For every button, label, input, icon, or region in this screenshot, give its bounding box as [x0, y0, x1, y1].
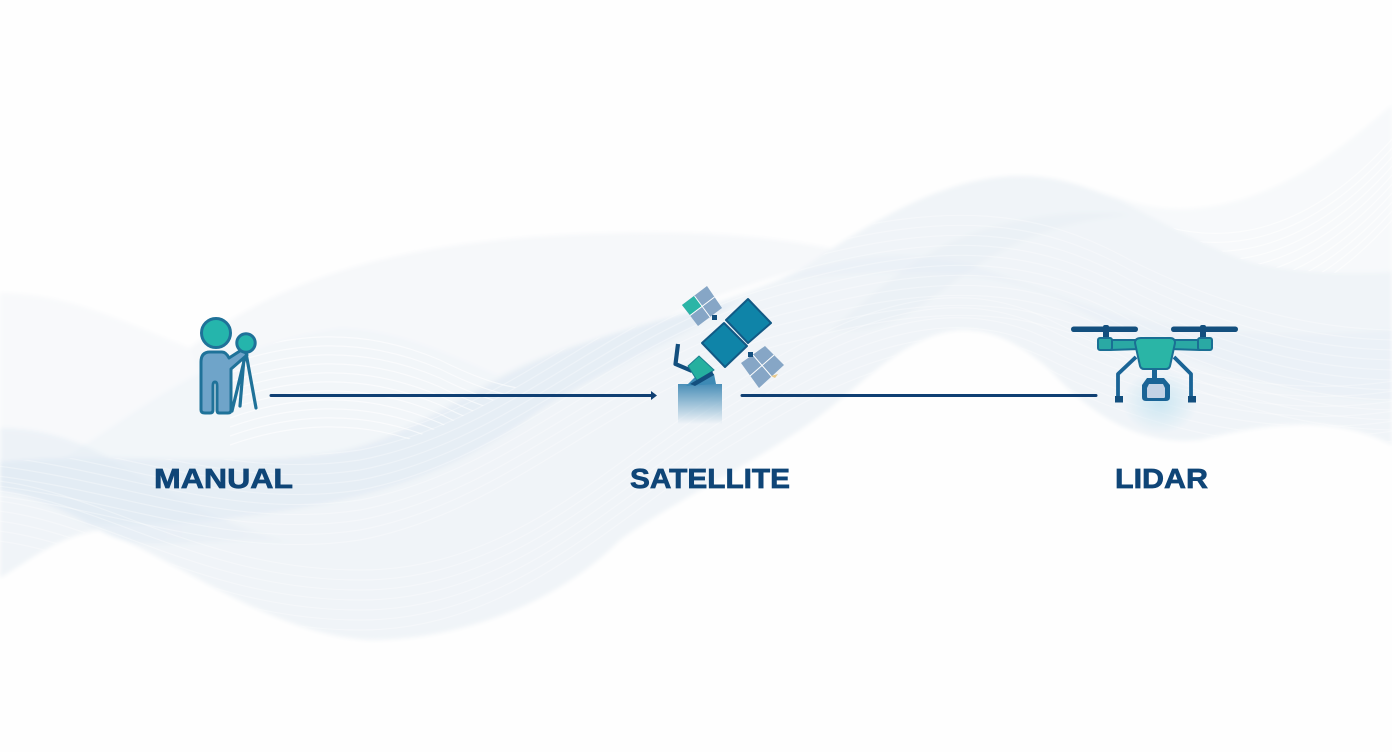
body [1135, 338, 1175, 369]
glow [1122, 370, 1198, 434]
stem [1152, 367, 1157, 379]
dish antenna [676, 344, 716, 386]
icon: surveyor with tripod [201, 318, 256, 413]
icon: drone [1071, 325, 1238, 434]
dark central panels [702, 299, 771, 367]
arms and motors [1098, 338, 1212, 350]
camera [1142, 378, 1170, 401]
arrow: manual to satellite [271, 391, 657, 400]
icon: satellite [676, 286, 784, 424]
connector line: satellite to lidar [742, 394, 1096, 397]
infographic canvas [0, 176, 1392, 640]
decorative wave ribbons [0, 176, 1392, 640]
propellers [1071, 325, 1238, 339]
solar panel top left [682, 286, 722, 326]
solar panel bottom right [741, 346, 784, 388]
label: satellite: SATELLITE [630, 463, 790, 494]
legs [1118, 357, 1191, 398]
ground base [678, 384, 722, 424]
label: lidar: LIDAR [1115, 463, 1208, 494]
label: manual: MANUAL [154, 463, 293, 494]
